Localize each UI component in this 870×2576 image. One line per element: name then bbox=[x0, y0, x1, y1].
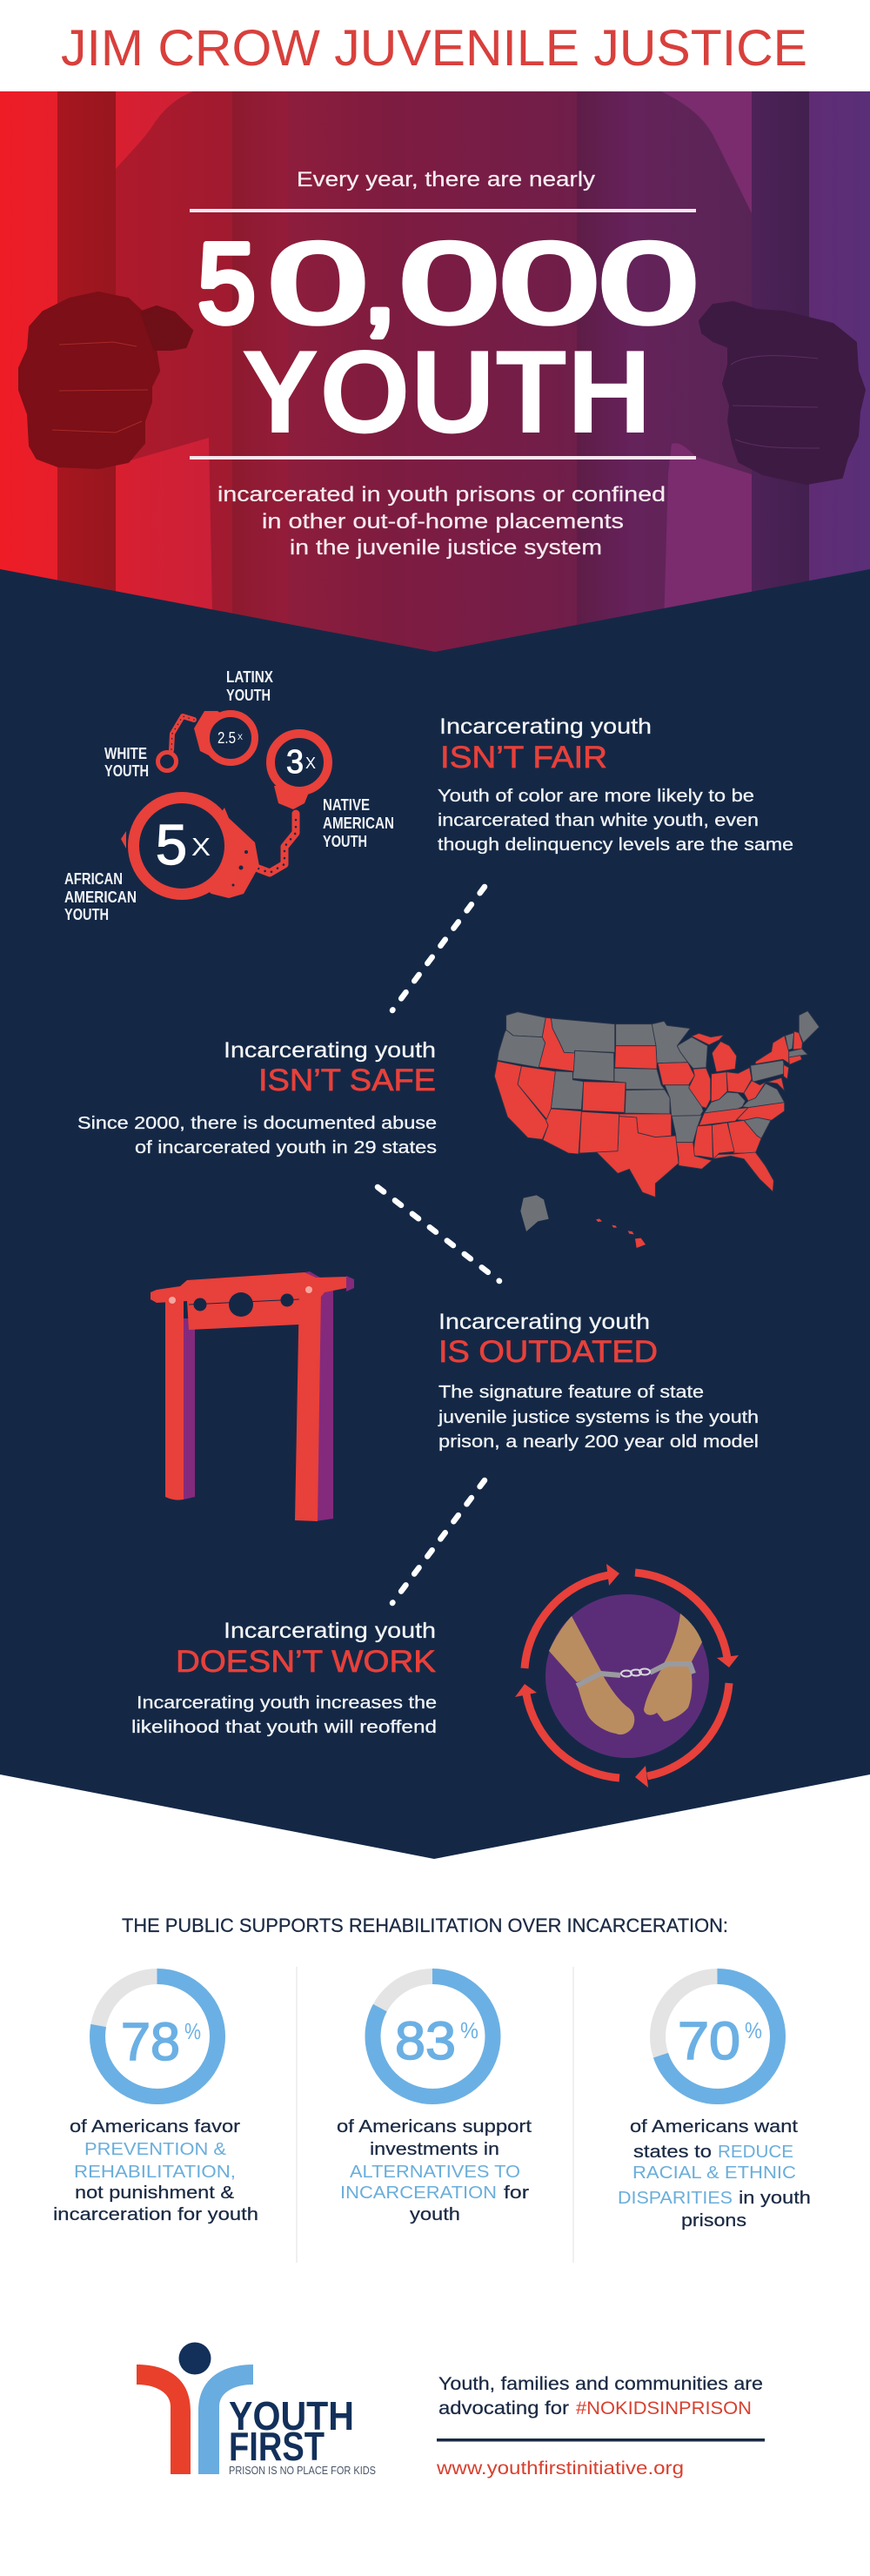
number 78: 78 bbox=[121, 2012, 180, 2071]
left post bbox=[165, 1289, 184, 1500]
text 83: for bbox=[504, 2183, 529, 2203]
panel: doesn't work bbox=[131, 1564, 739, 1788]
cuff: 5x bbox=[121, 797, 259, 898]
panel: hero bbox=[0, 91, 870, 657]
big number: 50,000: 5 bbox=[197, 219, 256, 346]
text: isn't safe bbox=[77, 1114, 437, 1157]
arrow: dashed connector 2 bbox=[378, 1187, 499, 1281]
big number: 50,000: , bbox=[362, 219, 398, 346]
cuff: 3x: X bbox=[305, 755, 316, 772]
big word: YOUTH: YOUTH bbox=[241, 325, 652, 458]
advocacy text: #NOKIDSINPRISON bbox=[576, 2398, 752, 2418]
cuff: white youth bbox=[158, 752, 176, 771]
text 70: REDUCE bbox=[718, 2142, 793, 2162]
cuff chain bbox=[621, 1669, 650, 1676]
text: isn't safe: of incarcerated youth in 29 states bbox=[135, 1138, 437, 1157]
panel: is outdated bbox=[151, 1271, 759, 1521]
heading: isn't safe: ISN’T SAFE bbox=[258, 1063, 436, 1097]
text: is outdated: prison, a nearly 200 year old model bbox=[438, 1432, 759, 1452]
cuff: 3x bbox=[271, 734, 328, 809]
divider bbox=[296, 1967, 298, 2263]
text: doesn't work bbox=[131, 1694, 437, 1737]
text: is outdated: The signature feature of state bbox=[438, 1383, 704, 1402]
arrow: dashed connector 3 bbox=[392, 1480, 485, 1603]
panel: isn't fair bbox=[64, 667, 793, 923]
labels: AMERICAN bbox=[323, 814, 394, 832]
labels: AMERICAN bbox=[64, 888, 137, 906]
states with documented abuse bbox=[494, 1017, 802, 1248]
logo wordmark: FIRST bbox=[229, 2424, 325, 2469]
text 70: prisons bbox=[681, 2210, 746, 2231]
heading: doesn't work: Incarcerating youth bbox=[224, 1619, 436, 1643]
stat: 70 percent bbox=[618, 1976, 811, 2231]
big number: 50,000: 0 bbox=[269, 219, 367, 346]
text 83 bbox=[337, 2116, 532, 2224]
icon: cycle of incarceration bbox=[515, 1564, 739, 1788]
text 83: investments in bbox=[370, 2139, 499, 2159]
icon: handcuffs chain with rates bbox=[64, 667, 394, 923]
arrow: dashed connector 1 bbox=[392, 887, 485, 1010]
number 83: % bbox=[460, 2017, 478, 2043]
labels: YOUTH bbox=[104, 761, 149, 780]
advocacy text: Youth, families and communities are bbox=[438, 2374, 763, 2394]
labels bbox=[64, 667, 394, 923]
icon: left fist bbox=[20, 293, 191, 467]
text 83: INCARCERATION bbox=[340, 2183, 497, 2203]
divider bbox=[572, 1967, 574, 2263]
cuff: 2.5x bbox=[194, 711, 255, 762]
map: US states with documented abuse bbox=[494, 1011, 820, 1248]
icon: stocks bbox=[151, 1271, 354, 1521]
big number: 50,000: 0 bbox=[500, 219, 599, 346]
purple disc bbox=[545, 1594, 709, 1758]
heading: isn't fair: Incarcerating youth bbox=[439, 714, 652, 739]
hero description bbox=[218, 483, 666, 560]
labels: YOUTH bbox=[64, 905, 109, 923]
number 70 bbox=[678, 2011, 762, 2070]
labels: WHITE bbox=[104, 744, 147, 762]
text: is outdated bbox=[438, 1383, 759, 1452]
number 83: 83 bbox=[395, 2011, 456, 2070]
text 78: incarceration for youth bbox=[53, 2204, 258, 2224]
labels: AFRICAN bbox=[64, 869, 123, 888]
number 70: 70 bbox=[678, 2011, 740, 2070]
text 70: DISPARITIES bbox=[618, 2188, 733, 2208]
donut chart 83 bbox=[372, 1976, 492, 2096]
text 70: states to bbox=[633, 2142, 712, 2162]
hero description: in other out-of-home placements bbox=[262, 510, 624, 533]
heading: isn't fair: ISN’T FAIR bbox=[440, 741, 607, 775]
text 78: PREVENTION & bbox=[84, 2139, 226, 2159]
beam bbox=[151, 1272, 346, 1330]
heading: public support: THE PUBLIC SUPPORTS REHABILITATION OVER INCARCERATION: bbox=[122, 1915, 728, 1936]
call to action bbox=[436, 2374, 765, 2479]
text 70: RACIAL & ETHNIC bbox=[632, 2163, 796, 2183]
purple post sides bbox=[184, 1271, 354, 1521]
number 78: % bbox=[184, 2018, 201, 2044]
states without documented abuse bbox=[498, 1011, 820, 1231]
icon: right fist bbox=[700, 303, 864, 483]
text: isn't fair bbox=[438, 787, 793, 855]
title: JIM CROW JUVENILE JUSTICE bbox=[61, 20, 807, 77]
text 70: of Americans want bbox=[630, 2116, 798, 2137]
panel: isn't safe bbox=[77, 1011, 820, 1248]
heading: isn't safe: Incarcerating youth bbox=[224, 1038, 436, 1063]
advocacy text bbox=[438, 2374, 763, 2418]
website url: www.youthfirstinitiative.org bbox=[436, 2459, 684, 2479]
cuff: 2.5x: 2.5 bbox=[218, 729, 236, 747]
cuff: 3x: 3 bbox=[286, 744, 304, 781]
text: isn't fair: Youth of color are more likely to be bbox=[438, 787, 754, 806]
heading: isn't safe bbox=[224, 1038, 436, 1097]
text: isn't fair: incarcerated than white youth, even bbox=[438, 811, 759, 830]
labels: YOUTH bbox=[323, 832, 367, 850]
labels: YOUTH bbox=[226, 686, 271, 704]
cuff: 2.5x: X bbox=[238, 733, 243, 741]
hero striped background bbox=[0, 91, 870, 657]
logo wordmark: YOUTH bbox=[229, 2393, 354, 2438]
bolts bbox=[169, 1286, 312, 1304]
silhouette: left arm and shoulder bbox=[116, 91, 232, 657]
chains bbox=[171, 716, 296, 873]
panel: navy reasons background bbox=[0, 569, 870, 1859]
heading: doesn't work: DOESN’T WORK bbox=[176, 1645, 436, 1679]
labels: LATINX bbox=[226, 667, 274, 686]
text 78 bbox=[53, 2116, 258, 2224]
hero bottom rule bbox=[190, 456, 696, 460]
text: doesn't work: Incarcerating youth increases the bbox=[137, 1694, 437, 1713]
text 83: of Americans support bbox=[337, 2116, 532, 2137]
logo: Youth First bbox=[137, 2343, 376, 2477]
donut chart 78 bbox=[97, 1976, 218, 2096]
advocacy text: advocating for bbox=[438, 2398, 569, 2418]
hero description: incarcerated in youth prisons or confined bbox=[218, 483, 666, 506]
text: isn't safe: Since 2000, there is documented abuse bbox=[77, 1114, 437, 1133]
heading: is outdated: IS OUTDATED bbox=[438, 1335, 658, 1369]
text 78: REHABILITATION, bbox=[74, 2162, 236, 2182]
hero intro text: Every year, there are nearly bbox=[297, 168, 595, 191]
stat: 83 percent bbox=[337, 1976, 532, 2224]
heading: isn't fair bbox=[439, 714, 652, 775]
donut chart 70 bbox=[658, 1976, 778, 2096]
stat: 78 percent bbox=[53, 1976, 258, 2224]
heading: is outdated: Incarcerating youth bbox=[438, 1310, 650, 1334]
labels: NATIVE bbox=[323, 795, 370, 814]
text 83: ALTERNATIVES TO bbox=[350, 2162, 520, 2182]
red arrows bbox=[515, 1564, 739, 1788]
heading: doesn't work bbox=[176, 1619, 436, 1679]
silhouette: right arm and shoulder bbox=[629, 91, 752, 657]
number 70: % bbox=[745, 2017, 762, 2043]
right post bbox=[295, 1278, 321, 1521]
text 78: not punishment & bbox=[75, 2183, 234, 2203]
cuff: 5x: X bbox=[191, 834, 211, 862]
stocks holes bbox=[189, 1292, 299, 1317]
arms and hands bbox=[549, 1613, 702, 1734]
hero top rule bbox=[190, 209, 696, 212]
text 78: of Americans favor bbox=[70, 2116, 240, 2137]
text 83: youth bbox=[410, 2204, 460, 2224]
big number: 50,000: 0 bbox=[599, 219, 698, 346]
logo wordmark bbox=[229, 2393, 376, 2477]
cuffs bbox=[577, 1664, 693, 1686]
big number: 50,000: 0 bbox=[400, 219, 499, 346]
text: isn't fair: though delinquency levels are the same bbox=[438, 835, 793, 855]
text 70: in youth bbox=[739, 2188, 811, 2208]
hero description: in the juvenile justice system bbox=[290, 536, 602, 560]
rule bbox=[437, 2438, 765, 2442]
logo figure bbox=[137, 2343, 253, 2474]
logo wordmark: PRISON IS NO PLACE FOR KIDS bbox=[229, 2464, 376, 2477]
cuff: 5x: 5 bbox=[156, 813, 187, 876]
text: doesn't work: likelihood that youth will reoffend bbox=[131, 1718, 437, 1737]
heading: is outdated bbox=[438, 1310, 658, 1369]
text: is outdated: juvenile justice systems is the youth bbox=[438, 1408, 759, 1427]
text 70 bbox=[618, 2116, 811, 2231]
